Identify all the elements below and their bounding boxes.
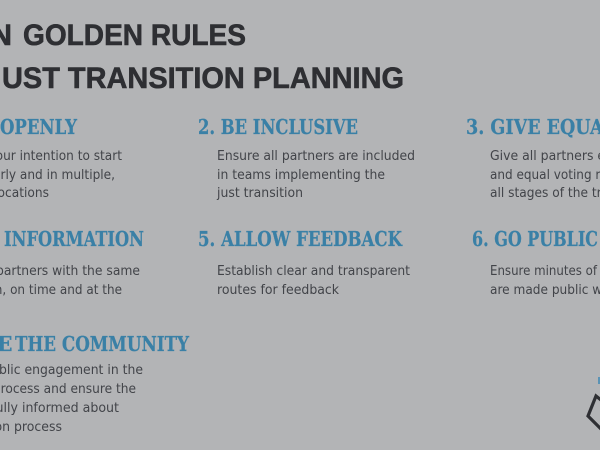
title: GOLDEN RULES — [23, 19, 246, 52]
rule 2: be inclusive: Ensure all partners are included — [217, 149, 415, 164]
title — [0, 19, 404, 95]
rule 7: involve the community — [0, 332, 189, 435]
rule 1: plan openly — [0, 115, 122, 201]
rule 5: allow feedback: 5. ALLOW FEEDBACK — [198, 227, 403, 251]
rule 4: share information — [0, 227, 144, 298]
rule 5: allow feedback — [198, 227, 410, 298]
rule 2: be inclusive: 2. BE INCLUSIVE — [198, 115, 358, 139]
rule 6: go public — [472, 227, 600, 298]
rule 4: share information: INFORMATION — [4, 227, 144, 251]
rule 7: involve the community: THE COMMUNITY — [15, 332, 189, 356]
rule 1: plan openly: OPENLY — [0, 115, 77, 139]
title: UST TRANSITION PLANNING — [2, 62, 404, 95]
rule 3: give equal — [466, 115, 600, 201]
rule 2: be inclusive: in teams implementing the — [217, 168, 385, 183]
rule 5: allow feedback: routes for feedback — [217, 283, 339, 298]
rule 2: be inclusive: just transition — [216, 186, 303, 201]
rule 2: be inclusive — [198, 115, 415, 201]
rule 5: allow feedback: Establish clear and transparent — [217, 264, 410, 279]
icon: logo fragment — [588, 377, 600, 430]
